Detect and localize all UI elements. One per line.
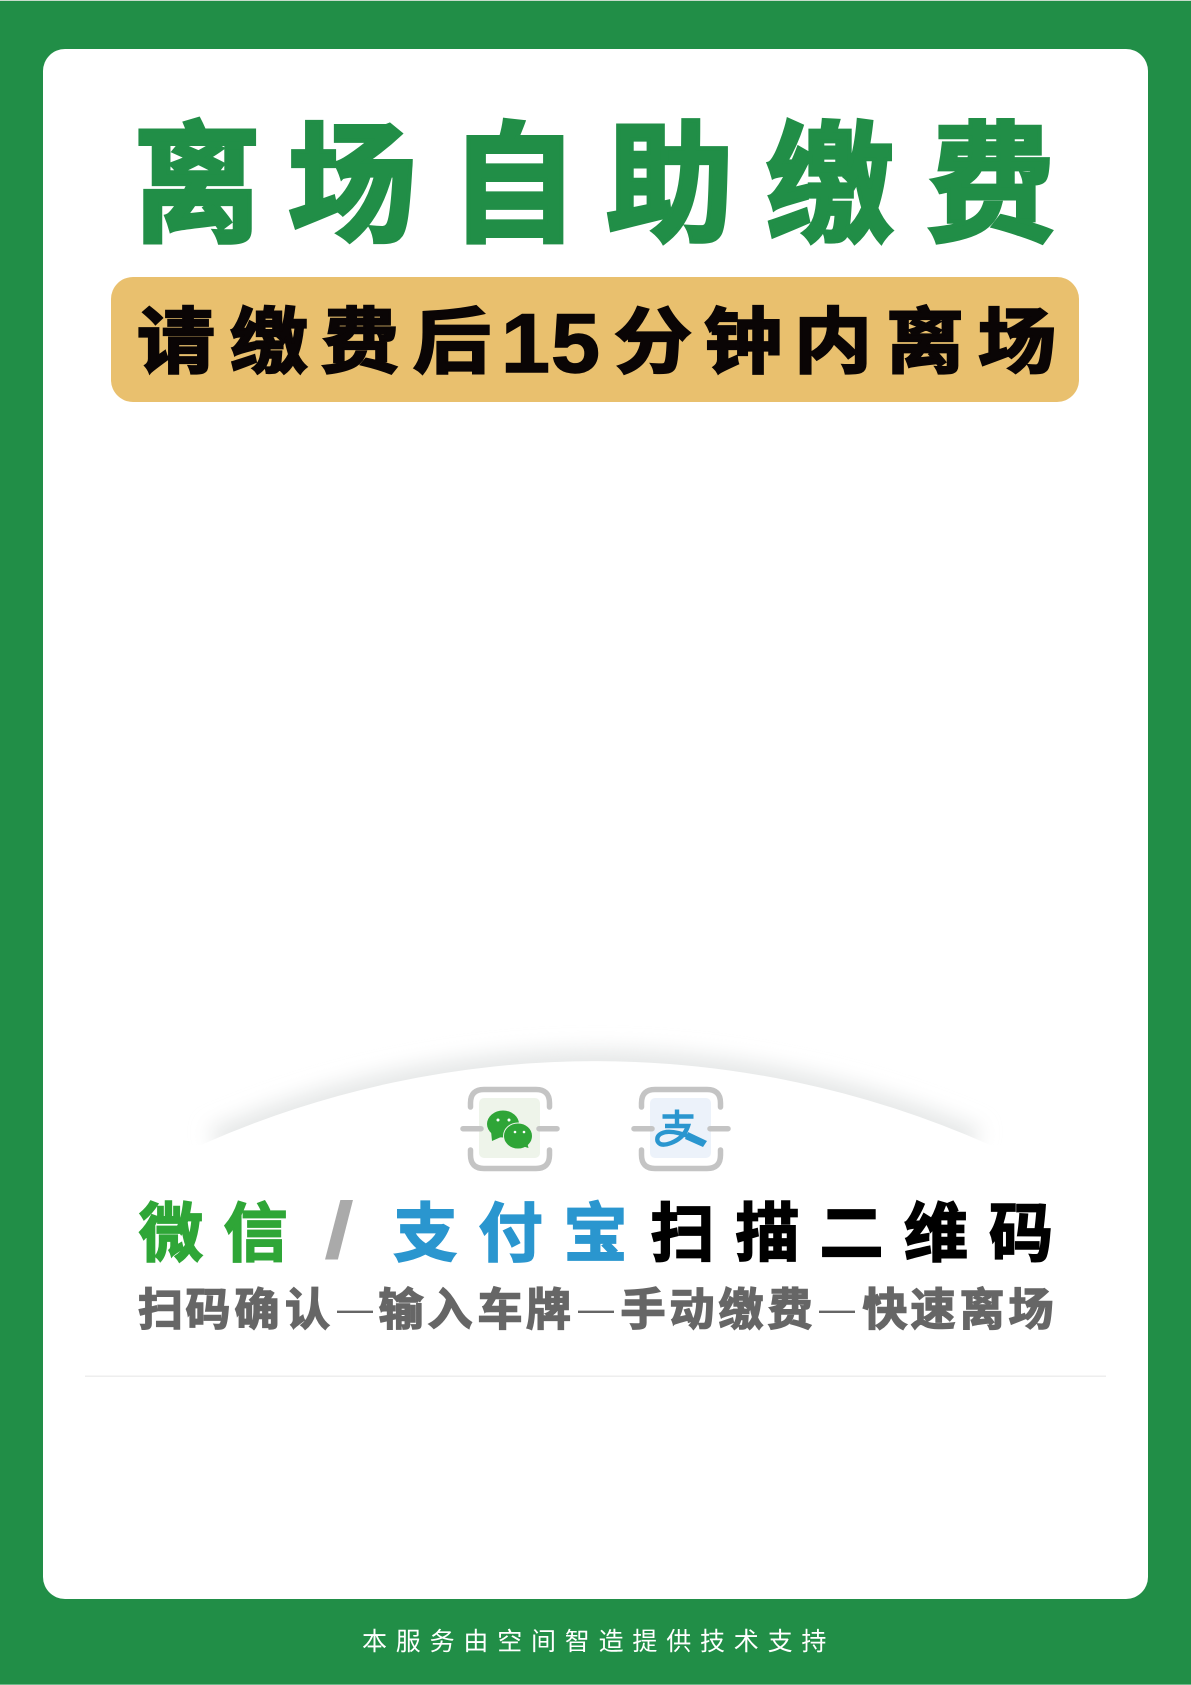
notice banner: 分钟内离场 bbox=[614, 302, 1056, 382]
steps text: 扫码确认 bbox=[138, 1286, 330, 1335]
notice banner: 15 bbox=[501, 297, 600, 391]
steps text: 快速离场 bbox=[862, 1286, 1053, 1335]
steps text: — bbox=[819, 1288, 855, 1329]
heading: scan instruction: 微信 bbox=[139, 1198, 288, 1270]
steps text: — bbox=[337, 1288, 373, 1329]
heading: scan instruction: 支付宝 bbox=[394, 1198, 628, 1270]
heading: scan instruction: 扫描二维码 bbox=[650, 1198, 1053, 1270]
notice banner bbox=[111, 277, 1079, 402]
steps text: 输入车牌 bbox=[378, 1286, 571, 1335]
steps text: — bbox=[578, 1288, 614, 1329]
notice banner: 请缴费后 bbox=[137, 302, 491, 382]
title: 离场自助缴费 bbox=[133, 114, 1055, 259]
steps text bbox=[138, 1286, 1053, 1335]
heading: scan instruction: / bbox=[324, 1186, 354, 1276]
icon: WeChat scan frame bbox=[463, 1090, 557, 1168]
arc shadow divider bbox=[130, 1049, 1060, 1195]
heading: scan instruction bbox=[139, 1186, 1053, 1276]
steps text: 手动缴费 bbox=[620, 1286, 812, 1335]
footer credit: 本服务由空间智造提供技术支持 bbox=[362, 1628, 835, 1656]
icon: Alipay scan frame bbox=[634, 1090, 728, 1168]
